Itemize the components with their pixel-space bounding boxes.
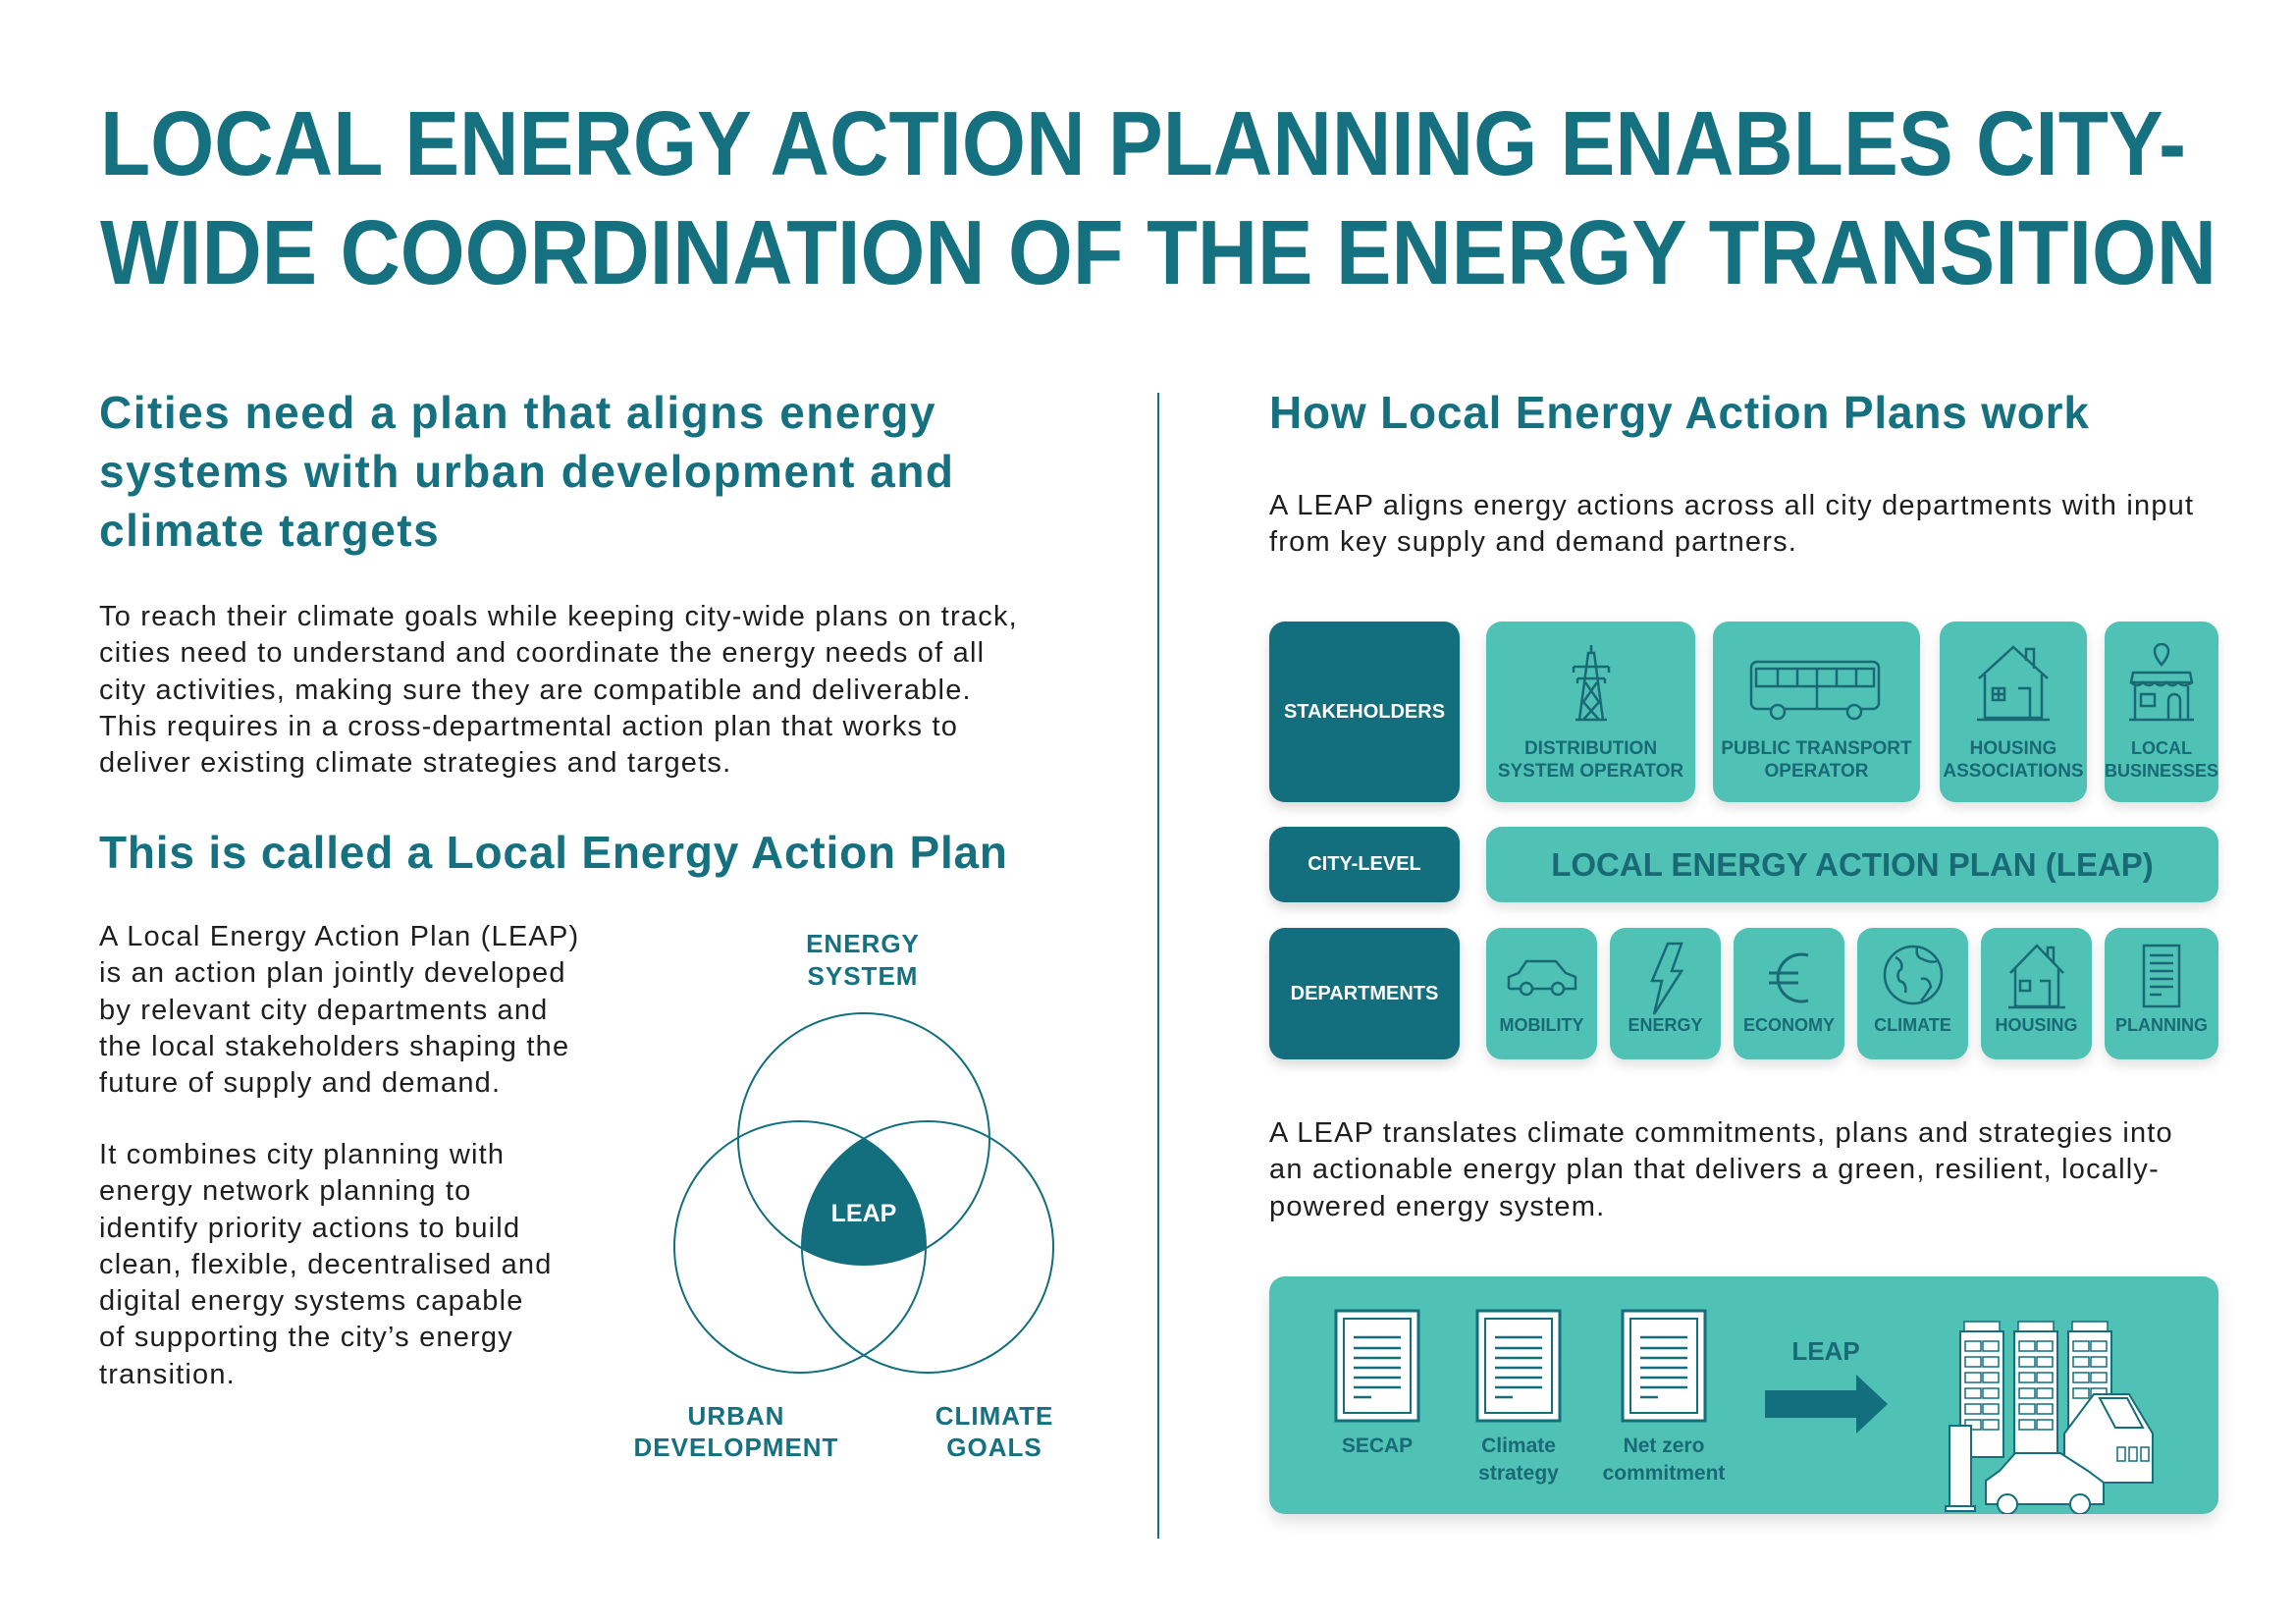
venn diagram: SYSTEM xyxy=(808,961,918,991)
icon: documents xyxy=(1336,1311,1705,1421)
box: climate xyxy=(1857,928,1968,1059)
box: public transport: OPERATOR xyxy=(1765,761,1868,782)
text: LEAP combines xyxy=(99,1139,553,1390)
label: departments xyxy=(1269,928,1460,1059)
box: local businesses: LOCAL xyxy=(2131,738,2192,758)
bar: LEAP xyxy=(1486,827,2218,902)
text: LEAP translates xyxy=(1269,1117,2173,1222)
text: LEAP aligns: A LEAP aligns energy actions across all city departments with input xyxy=(1269,490,2194,521)
heading: this is called LEAP: This is called a Local Energy Action Plan xyxy=(99,827,1008,878)
box: housing associations: HOUSING xyxy=(1970,738,2056,759)
heading: cities need a plan: Cities need a plan that aligns energy xyxy=(99,387,936,438)
text: intro paragraph: city activities, making sure they are compatible and deliverable. xyxy=(99,675,972,706)
text: intro paragraph: cities need to understand and coordinate the energy needs of all xyxy=(99,637,985,669)
venn diagram: ENERGY xyxy=(806,929,920,958)
labels: documents: SECAP xyxy=(1342,1435,1413,1457)
box: mobility xyxy=(1486,928,1597,1059)
labels: documents: strategy xyxy=(1478,1462,1559,1485)
box: planning: PLANNING xyxy=(2115,1015,2208,1035)
box: energy xyxy=(1610,928,1721,1059)
text: LEAP aligns xyxy=(1269,490,2194,558)
venn diagram: URBAN xyxy=(688,1401,784,1431)
venn diagram: GOALS xyxy=(946,1433,1042,1462)
title xyxy=(100,92,2216,303)
box: climate: CLIMATE xyxy=(1874,1015,1951,1035)
divider xyxy=(1157,393,1159,1539)
text: intro paragraph: This requires in a cross-departmental action plan that works to xyxy=(99,711,958,742)
box: housing: HOUSING xyxy=(1995,1015,2077,1035)
box: housing associations: ASSOCIATIONS xyxy=(1943,761,2084,782)
venn diagram: DEVELOPMENT xyxy=(634,1433,838,1462)
box: planning xyxy=(2105,928,2218,1059)
box: DSO: SYSTEM OPERATOR xyxy=(1498,761,1683,782)
text: LEAP translates: powered energy system. xyxy=(1269,1191,1605,1222)
box: DSO: DISTRIBUTION xyxy=(1524,738,1657,759)
heading: how LEAPs work: How Local Energy Action Plans work xyxy=(1269,387,2090,438)
venn diagram: CLIMATE xyxy=(935,1401,1053,1431)
venn diagram xyxy=(634,929,1054,1462)
label: departments: DEPARTMENTS xyxy=(1291,982,1438,1003)
label: stakeholders: STAKEHOLDERS xyxy=(1284,701,1445,723)
text: intro paragraph xyxy=(99,601,1018,779)
icon: city buildings and EV xyxy=(1946,1322,2153,1514)
text: LEAP description: by relevant city departments and xyxy=(99,995,549,1026)
text: LEAP description: is an action plan jointly developed xyxy=(99,957,566,989)
labels: documents: Net zero xyxy=(1624,1435,1704,1457)
text: intro paragraph: To reach their climate goals while keeping city-wide plans on track, xyxy=(99,601,1018,632)
heading: cities need a plan: climate targets xyxy=(99,505,440,556)
box: public transport xyxy=(1713,622,1920,802)
text: LEAP combines: transition. xyxy=(99,1359,236,1390)
bar: LEAP: LOCAL ENERGY ACTION PLAN (LEAP) xyxy=(1551,846,2154,883)
box: mobility: MOBILITY xyxy=(1500,1015,1584,1035)
text: LEAP combines: energy network planning to xyxy=(99,1175,471,1207)
panel: from strategy to energy system xyxy=(1269,1276,2218,1514)
label: city-level xyxy=(1269,827,1460,902)
text: LEAP description: future of supply and demand. xyxy=(99,1067,501,1099)
box: public transport: PUBLIC TRANSPORT xyxy=(1721,738,1912,759)
box: economy xyxy=(1734,928,1844,1059)
labels: documents xyxy=(1342,1435,1725,1485)
text: LEAP description: the local stakeholders shaping the xyxy=(99,1031,569,1062)
box: economy: ECONOMY xyxy=(1743,1015,1835,1035)
arrow: LEAP: LEAP xyxy=(1791,1336,1860,1366)
diagram: stakeholders / city / departments xyxy=(1264,622,2222,1070)
arrow: LEAP xyxy=(1765,1336,1888,1434)
text: intro paragraph: deliver existing climate strategies and targets. xyxy=(99,747,731,779)
text: LEAP combines: of supporting the city’s energy xyxy=(99,1322,513,1353)
box: local businesses: BUSINESSES xyxy=(2105,761,2218,781)
box: energy: ENERGY xyxy=(1628,1015,1703,1035)
text: LEAP description xyxy=(99,921,579,1099)
text: LEAP aligns: from key supply and demand partners. xyxy=(1269,526,1797,558)
box: housing associations xyxy=(1940,622,2087,802)
labels: documents: commitment xyxy=(1603,1462,1725,1485)
text: LEAP translates: an actionable energy plan that delivers a green, resilient, locally- xyxy=(1269,1154,2160,1185)
text: LEAP combines: identify priority actions to build xyxy=(99,1213,520,1244)
label: city-level: CITY-LEVEL xyxy=(1308,853,1421,875)
box: DSO xyxy=(1486,622,1695,802)
text: LEAP combines: digital energy systems capable xyxy=(99,1285,524,1317)
heading: cities need a plan xyxy=(99,387,955,556)
box: local businesses xyxy=(2105,622,2218,802)
label: stakeholders xyxy=(1269,622,1460,802)
text: LEAP combines: It combines city planning with xyxy=(99,1139,505,1170)
text: LEAP combines: clean, flexible, decentralised and xyxy=(99,1249,553,1280)
text: LEAP description: A Local Energy Action Plan (LEAP) xyxy=(99,921,579,952)
text: LEAP translates: A LEAP translates climate commitments, plans and strategies into xyxy=(1269,1117,2173,1149)
box: housing xyxy=(1981,928,2092,1059)
heading: cities need a plan: systems with urban development and xyxy=(99,446,955,497)
venn diagram: LEAP xyxy=(831,1200,896,1227)
labels: documents: Climate xyxy=(1481,1435,1556,1457)
